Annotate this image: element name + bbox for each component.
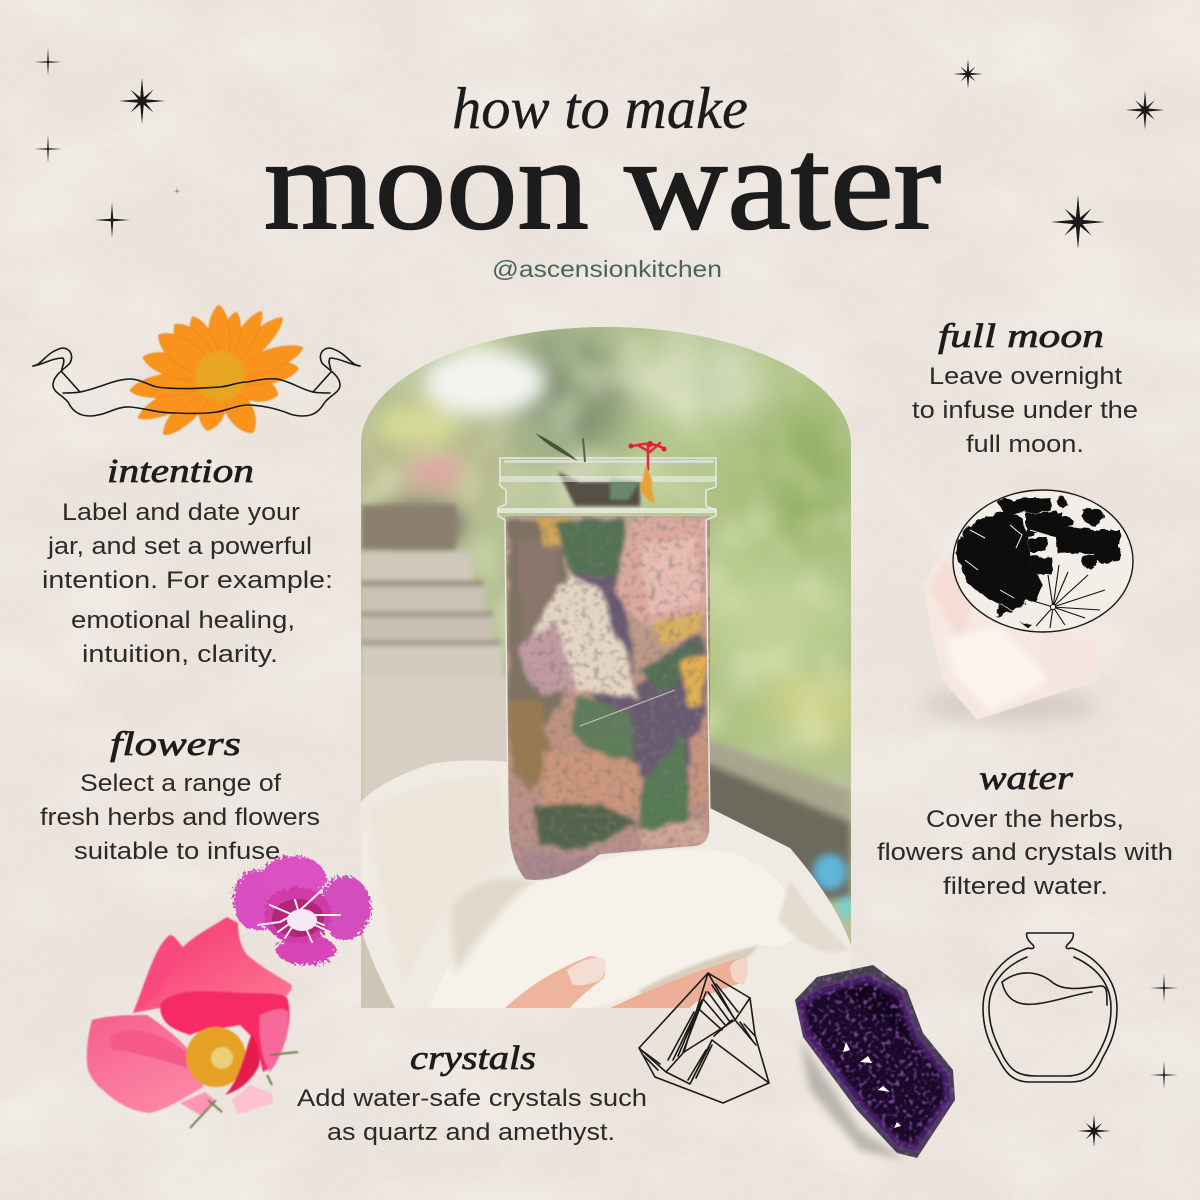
sparkle stars bottom right bbox=[1077, 974, 1178, 1148]
text block: intention body bbox=[42, 499, 333, 668]
panel: full moon bbox=[912, 318, 1138, 721]
icon: magenta dianthus bbox=[233, 856, 371, 965]
text block: water body: filtered water. bbox=[943, 873, 1108, 900]
sparkle stars top left bbox=[34, 48, 181, 238]
heading: crystals: crystals bbox=[410, 1040, 536, 1077]
jar bbox=[498, 458, 720, 890]
hand bbox=[505, 956, 748, 1008]
text block: intention body: intention. For example: bbox=[42, 567, 333, 594]
text block: water body bbox=[877, 806, 1173, 900]
text block: full moon body: to infuse under the bbox=[912, 397, 1138, 424]
handle: @ascensionkitchen bbox=[492, 256, 722, 282]
text block: intention body: intuition, clarity. bbox=[82, 641, 278, 668]
heading: intention: intention bbox=[107, 453, 254, 490]
text block: intention body: Label and date your bbox=[62, 499, 300, 526]
text block: crystals body bbox=[297, 1085, 647, 1146]
text block: flowers body: fresh herbs and flowers bbox=[40, 804, 320, 831]
text block: water body: flowers and crystals with bbox=[877, 839, 1173, 866]
text block: flowers body bbox=[40, 770, 320, 865]
text block: crystals body: Add water-safe crystals such bbox=[297, 1085, 647, 1112]
heading: full moon: full moon bbox=[938, 318, 1104, 355]
icon: line-art moon bbox=[953, 490, 1133, 632]
title line: moon water: moon water bbox=[264, 112, 941, 257]
text block: flowers body: suitable to infuse. bbox=[74, 838, 288, 865]
cloth bbox=[361, 760, 851, 1008]
icon: pink rose bbox=[87, 917, 298, 1128]
panel: crystals bbox=[297, 965, 955, 1161]
photo: jar of herbs held in cloth bbox=[361, 327, 870, 1008]
text block: water body: Cover the herbs, bbox=[926, 806, 1124, 833]
icon: rose quartz bbox=[922, 552, 1098, 721]
sparkle stars top right bbox=[953, 59, 1165, 249]
panel: flowers bbox=[40, 726, 371, 1128]
jar neck dark leaf seen through glass bbox=[558, 472, 640, 506]
text block: intention body: jar, and set a powerful bbox=[47, 533, 312, 560]
icon: amethyst geode bbox=[795, 965, 955, 1161]
text block: full moon body: full moon. bbox=[966, 431, 1084, 458]
text block: flowers body: Select a range of bbox=[80, 770, 281, 797]
heading: flowers: flowers bbox=[110, 726, 241, 763]
herb sprig and red stamen bbox=[535, 433, 666, 505]
heading: water: water bbox=[979, 760, 1074, 797]
icon: orange calendula flower bbox=[128, 305, 306, 442]
panel: intention bbox=[33, 305, 360, 668]
icon: line-art jar of water bbox=[983, 933, 1117, 1082]
text block: intention body: emotional healing, bbox=[71, 607, 295, 634]
icon: ribbon banner bbox=[33, 348, 360, 416]
icon: line-art crystal bbox=[639, 973, 769, 1103]
text block: full moon body bbox=[912, 363, 1138, 458]
panel: water bbox=[877, 760, 1178, 1148]
text block: full moon body: Leave overnight bbox=[929, 363, 1122, 390]
title line: how to make: how to make bbox=[452, 75, 748, 141]
title bbox=[264, 75, 941, 282]
text block: crystals body: as quartz and amethyst. bbox=[327, 1119, 615, 1146]
